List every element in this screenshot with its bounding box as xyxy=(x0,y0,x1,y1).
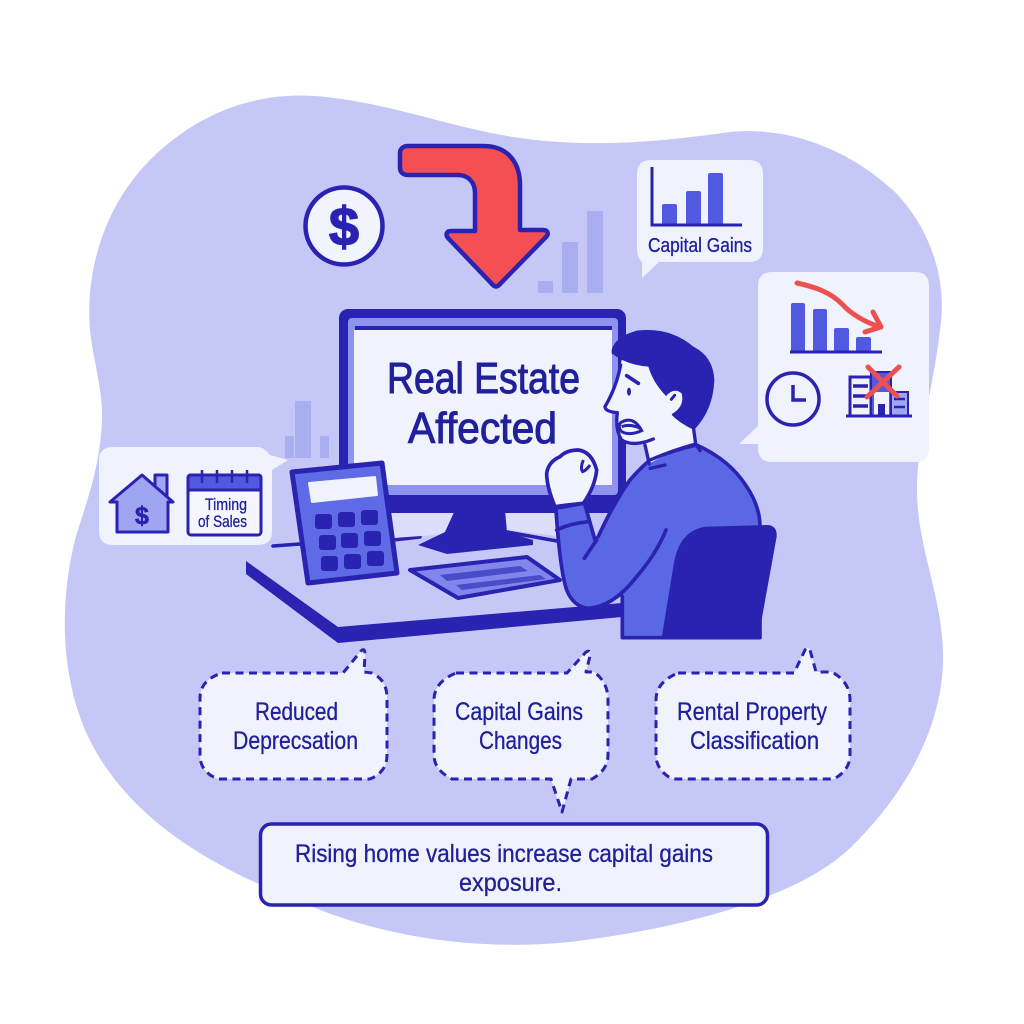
icon: calendar: Timing xyxy=(205,496,247,514)
dashed callout: rental property classification: Rental Property xyxy=(677,698,827,726)
screen title: Affected xyxy=(408,404,557,453)
dashed callout: reduced depreciation xyxy=(200,650,387,779)
dashed callout: capital gains changes xyxy=(434,651,608,812)
icon: calendar xyxy=(188,470,261,535)
icon: clock xyxy=(767,373,819,425)
monitor xyxy=(339,309,626,554)
chair xyxy=(662,525,777,638)
arrow: red downtrend xyxy=(797,283,881,332)
screen title xyxy=(387,354,580,453)
torso xyxy=(587,445,760,638)
callout: house and timing of sales xyxy=(99,447,288,545)
screen title: Real Estate xyxy=(387,354,580,403)
summary box: exposure. xyxy=(459,869,562,897)
icon: calendar: of Sales xyxy=(198,513,247,531)
summary box: Rising home values increase capital gains xyxy=(295,840,713,868)
icon: house with dollar xyxy=(110,475,173,532)
dashed callout: reduced depreciation: Deprecsation xyxy=(233,727,358,755)
dashed callout: rental property classification: Classification xyxy=(690,727,819,755)
callout: falling values and property xyxy=(739,272,929,462)
desk xyxy=(246,532,622,643)
face features xyxy=(619,376,642,434)
callout label: Capital Gains xyxy=(648,235,752,257)
faint bars top xyxy=(538,211,603,293)
dashed callout: reduced depreciation: Reduced xyxy=(255,698,338,726)
bar chart: falling xyxy=(790,303,882,352)
fist xyxy=(547,450,597,507)
head xyxy=(605,330,714,468)
summary box xyxy=(260,824,768,905)
faint bars left xyxy=(285,401,329,458)
keyboard xyxy=(410,557,560,598)
icon: house with dollar: $ xyxy=(135,502,149,530)
icon: crossed-out building xyxy=(846,367,912,416)
background blob xyxy=(65,95,943,945)
bar chart: rising xyxy=(652,167,742,225)
person at desk xyxy=(547,330,777,638)
icon: dollar coin: $ xyxy=(329,197,359,257)
hair xyxy=(612,330,714,430)
callout: capital gains xyxy=(637,160,763,278)
icon: dollar coin xyxy=(306,188,382,264)
dashed callout: capital gains changes: Changes xyxy=(479,727,562,755)
dashed callout: capital gains changes: Capital Gains xyxy=(455,698,583,726)
dashed callout: rental property classification xyxy=(656,648,850,779)
ear xyxy=(665,391,682,414)
arm xyxy=(556,505,666,608)
calculator xyxy=(292,463,397,583)
arrow: red downward turn xyxy=(400,146,548,286)
